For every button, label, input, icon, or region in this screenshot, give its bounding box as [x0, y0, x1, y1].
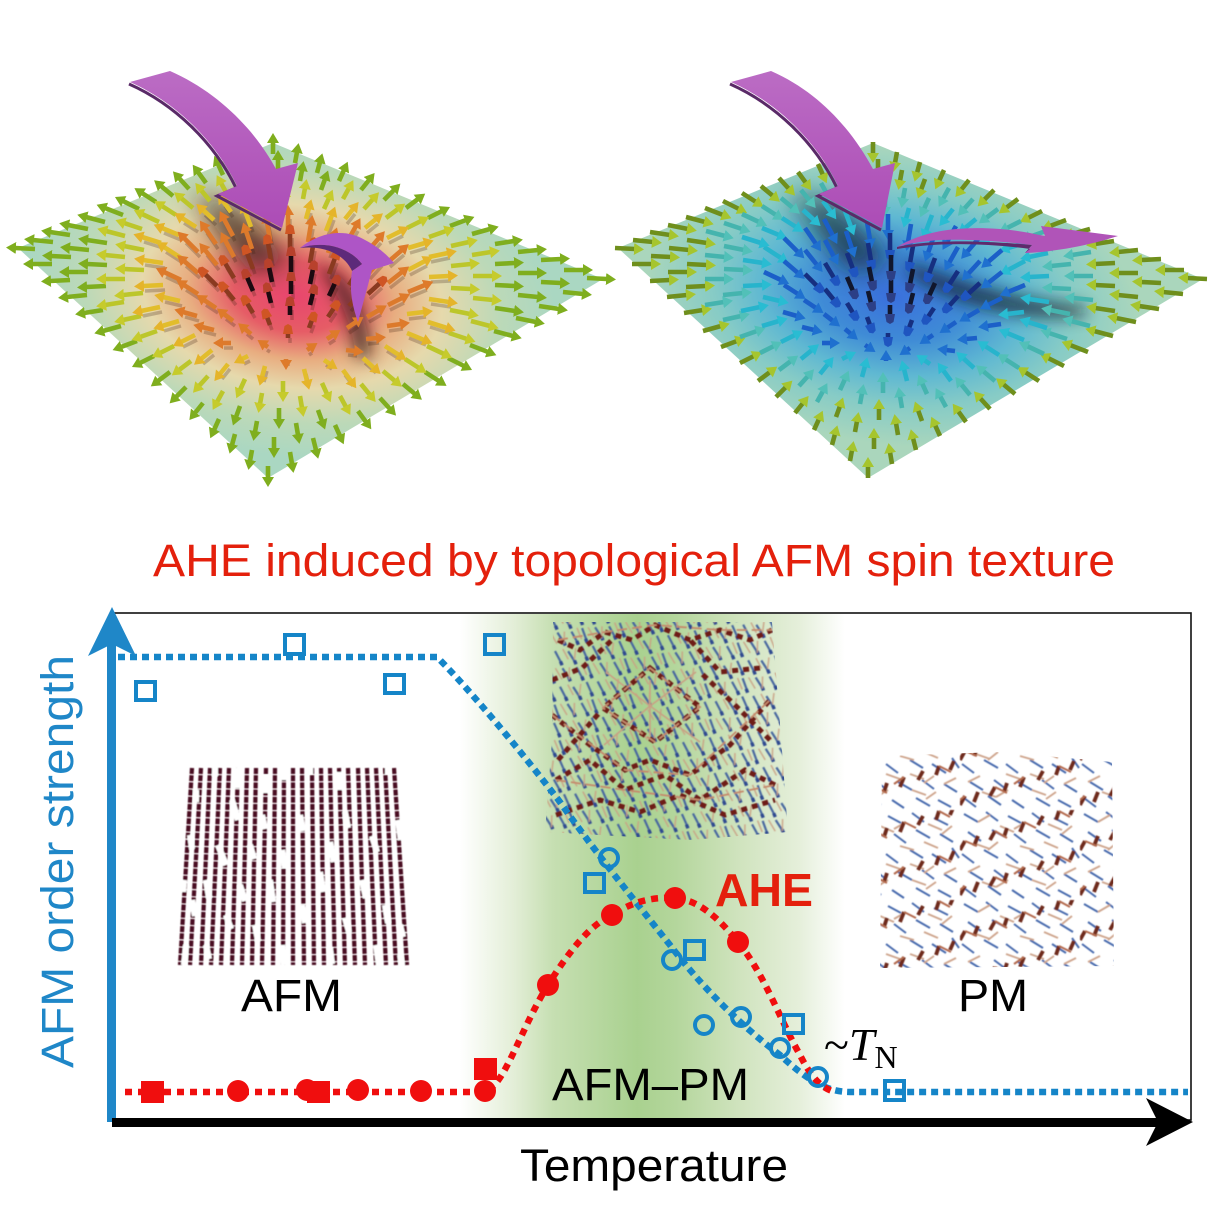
Neel temperature label: N [874, 1039, 898, 1075]
chart frame [113, 613, 1191, 1120]
AHE data points, red [141, 887, 749, 1103]
x axis label: Temperature [520, 1140, 788, 1191]
inset: AFM-PM textured spins [540, 620, 790, 840]
icon: large incoming purple arrow [129, 71, 298, 230]
panel: AHE skyrmion texture, blue [615, 71, 1207, 478]
shadows on red plate [190, 195, 372, 358]
icon: flat deflected purple arrow [897, 226, 1118, 253]
inset: AFM ordered spins [180, 766, 407, 965]
AFM-PM shaded band [460, 614, 845, 1119]
shadows on blue plate [790, 195, 1085, 317]
inset: PM disordered spins [875, 750, 1120, 972]
plate surface blue [618, 143, 1203, 478]
y axis label: AFM order strength [32, 655, 83, 1068]
red dotted AHE curve [125, 898, 835, 1092]
icon: small curved deflected purple arrow [300, 233, 394, 322]
y axis arrow [88, 607, 136, 1122]
spin arrows blue [615, 142, 1207, 478]
Neel temperature label: ~T [824, 1019, 874, 1070]
panel: AFM order vs temperature chart [32, 607, 1193, 1191]
title: AHE induced by topological AFM spin texture [153, 535, 1115, 586]
blue dotted AFM order curve [118, 657, 1188, 1092]
PM label: PM [958, 970, 1028, 1021]
AFM order data points, blue [136, 635, 904, 1100]
AFM-PM label: AFM–PM [552, 1059, 749, 1110]
spin arrows red [15, 142, 607, 478]
AFM label: AFM [241, 970, 342, 1021]
panel: AHE skyrmion texture, red [15, 71, 607, 478]
x axis arrow [112, 1098, 1193, 1146]
arrow shadows red [143, 206, 451, 386]
AHE curve label: AHE [715, 864, 813, 916]
plate surface red [18, 143, 603, 478]
icon: large incoming purple arrow [730, 71, 895, 230]
